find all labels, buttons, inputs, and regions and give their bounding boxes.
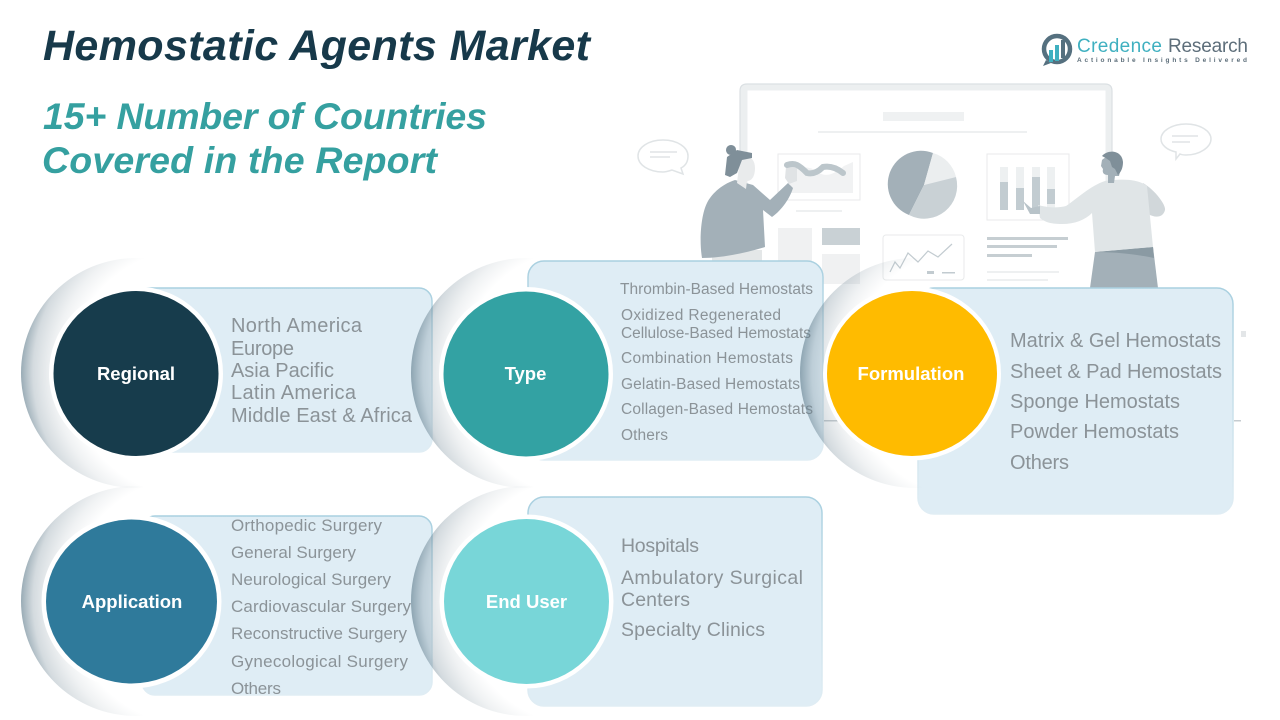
floor line marks <box>824 331 1246 422</box>
circle: Type: Type <box>505 363 546 384</box>
woman torso and arm <box>701 180 793 258</box>
circle: Formulation <box>827 291 997 456</box>
speech bubble left <box>638 140 688 174</box>
circle: Regional <box>54 291 218 456</box>
list: regions: North America <box>231 315 363 337</box>
logo tagline: Actionable Insights Delivered <box>1077 57 1247 64</box>
screen title bar <box>883 112 964 121</box>
woman hair <box>725 145 752 177</box>
circle: End User <box>444 519 609 684</box>
logo icon <box>1043 36 1070 66</box>
woman presenter <box>701 145 843 290</box>
logo: Credence Research <box>1043 36 1248 66</box>
list: formulations: Others <box>1010 452 1069 474</box>
circle: Regional: Regional <box>97 363 175 384</box>
woman hand and wave <box>785 167 797 184</box>
list: applications: Reconstructive Surgery <box>231 624 408 643</box>
panel: Formulation <box>800 258 1233 514</box>
list: regions: Europe <box>231 338 294 360</box>
logo name: Credence <box>1077 36 1162 57</box>
circle: Formulation: Formulation <box>858 363 964 384</box>
list: formulations: Sheet & Pad Hemostats <box>1010 361 1222 383</box>
logo name: Research <box>1168 36 1248 57</box>
list: end users <box>621 535 803 641</box>
list: types <box>620 281 813 444</box>
list: end users: Hospitals <box>621 535 699 557</box>
panel: End User <box>411 486 822 716</box>
screen pie chart <box>888 151 957 219</box>
list: end users: Ambulatory Surgical <box>621 567 803 589</box>
list: applications: Orthopedic Surgery <box>231 516 382 535</box>
list: regions: Asia Pacific <box>231 360 334 382</box>
man presenter <box>1023 152 1165 288</box>
screen blocks <box>778 228 860 288</box>
screen area chart <box>778 154 860 212</box>
list: regions <box>231 315 413 427</box>
screen bar chart <box>987 154 1069 220</box>
circle: Application <box>46 520 217 684</box>
circle: End User: End User <box>486 591 567 612</box>
list: regions: Latin America <box>231 382 357 404</box>
list: applications <box>231 516 412 698</box>
monitor frame <box>740 84 1112 220</box>
list: formulations: Matrix & Gel Hemostats <box>1010 330 1221 352</box>
list: types: Others <box>621 427 668 444</box>
list: end users: Centers <box>621 589 690 611</box>
panel: Application <box>21 486 432 716</box>
panel: Type <box>411 258 823 488</box>
man hand <box>1023 201 1040 214</box>
man trousers <box>1090 247 1158 288</box>
screen line chart <box>883 235 964 280</box>
illustration: presenters at a dashboard screen <box>638 84 1246 422</box>
list: end users: Specialty Clinics <box>621 619 765 641</box>
list: types: Gelatin-Based Hemostats <box>621 376 800 393</box>
list: applications: Others <box>231 679 281 698</box>
subtitle: Covered in the Report <box>42 139 438 181</box>
woman trousers <box>712 250 762 290</box>
list: types: Collagen-Based Hemostats <box>621 401 813 418</box>
man torso and arm <box>1038 180 1153 252</box>
speech bubble right <box>1161 124 1211 159</box>
woman face <box>737 156 755 189</box>
list: formulations <box>1010 330 1222 474</box>
list: regions: Middle East & Africa <box>231 405 413 427</box>
list: applications: General Surgery <box>231 543 356 562</box>
list: types: Combination Hemostats <box>621 350 793 367</box>
man back arm <box>1143 183 1165 217</box>
list: applications: Neurological Surgery <box>231 570 392 589</box>
subtitle: 15+ Number of Countries <box>43 95 487 137</box>
list: formulations: Powder Hemostats <box>1010 421 1179 443</box>
list: types: Thrombin-Based Hemostats <box>620 281 813 298</box>
list: types: Oxidized Regenerated <box>621 307 781 324</box>
man head <box>1101 157 1121 183</box>
list: applications: Gynecological Surgery <box>231 652 408 671</box>
circle: Type <box>444 292 608 456</box>
title: Hemostatic Agents Market <box>43 22 592 70</box>
man hair <box>1102 152 1123 175</box>
list: formulations: Sponge Hemostats <box>1010 391 1180 413</box>
circle: Application: Application <box>82 591 182 612</box>
list: applications: Cardiovascular Surgery <box>231 597 412 616</box>
screen text lines <box>987 237 1068 281</box>
panel: Regional <box>21 258 432 488</box>
list: types: Cellulose-Based Hemostats <box>621 325 811 342</box>
